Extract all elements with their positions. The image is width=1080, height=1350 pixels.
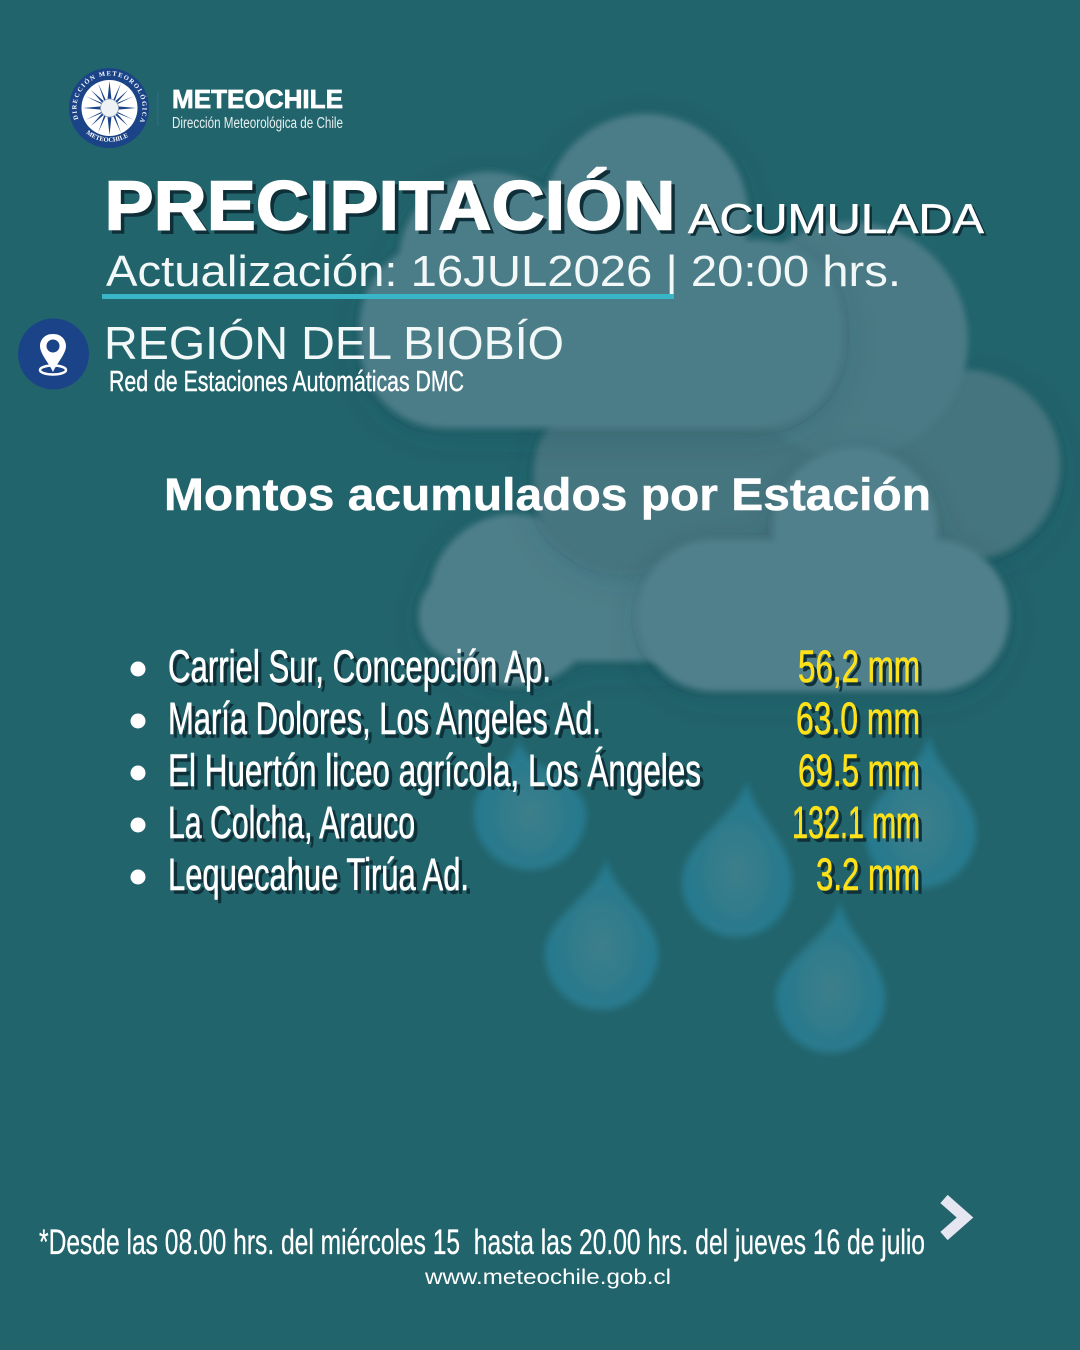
icon: rain drops xyxy=(474,733,976,1053)
station: Lequecahue: Lequecahue Tirúa Ad. xyxy=(168,849,469,900)
logo divider xyxy=(157,92,158,126)
station: María Dolores: María Dolores, Los Angeles Ad. xyxy=(172,696,604,748)
station list xyxy=(130,641,924,904)
station: María Dolores: María Dolores, Los Angeles Ad. xyxy=(168,693,601,744)
subtitle: acumulada: ACUMULADA xyxy=(690,198,986,244)
icon: compass star xyxy=(83,81,136,135)
logo ring text xyxy=(76,75,142,121)
arrow: next xyxy=(944,1199,965,1236)
station: Lequecahue xyxy=(130,849,924,904)
accent underline xyxy=(102,294,674,299)
icon: back cloud xyxy=(534,370,1060,570)
station: La Colcha: La Colcha, Arauco xyxy=(168,797,415,848)
station: La Colcha: 132.1 mm xyxy=(796,800,924,852)
station: Carriel Sur xyxy=(130,641,924,696)
station: El Huertón: 69.5 mm xyxy=(802,748,924,800)
logo bottom text xyxy=(79,125,140,142)
logo: Dirección Meteorológica: METEOCHILE xyxy=(86,130,128,142)
station: La Colcha: 132.1 mm xyxy=(792,797,920,848)
station: Carriel Sur: 56,2 mm xyxy=(798,641,920,692)
station: Lequecahue: 3.2 mm xyxy=(820,852,924,904)
logo: Dirección Meteorológica xyxy=(69,68,149,148)
brand name: METEOCHILE xyxy=(172,84,343,114)
title: PRECIPITACIÓN xyxy=(104,166,676,244)
update time: Actualización: 16JUL2026 | 20:00 hrs. xyxy=(106,247,901,296)
title: PRECIPITACIÓN xyxy=(108,170,679,248)
station: Lequecahue: 3.2 mm xyxy=(816,849,920,900)
station: El Huertón: El Huertón liceo agrícola, Los Ángeles xyxy=(168,745,701,796)
background illustration: rain cloud xyxy=(360,114,1060,1053)
network label: Red de Estaciones Automáticas DMC xyxy=(109,366,464,398)
station: La Colcha: La Colcha, Arauco xyxy=(172,800,418,852)
subtitle: acumulada: ACUMULADA xyxy=(688,195,984,242)
station: La Colcha xyxy=(130,797,924,852)
station: Carriel Sur: Carriel Sur, Concepción Ap. xyxy=(168,641,551,692)
logo: Dirección Meteorológica: DIRECCIÓN METEOROLÓGICA xyxy=(72,71,147,122)
station: El Huertón: 69.5 mm xyxy=(798,745,920,796)
station: Carriel Sur: 56,2 mm xyxy=(802,644,924,696)
website: www.meteochile.gob.cl xyxy=(424,1266,671,1289)
station: María Dolores: 63.0 mm xyxy=(796,693,920,744)
region heading: REGIÓN DEL BIOBÍO xyxy=(104,317,564,369)
icon: top cloud xyxy=(360,114,842,428)
station: El Huertón: El Huertón liceo agrícola, Los Ángeles xyxy=(172,748,704,800)
station: María Dolores: 63.0 mm xyxy=(800,696,924,748)
station: Carriel Sur: Carriel Sur, Concepción Ap. xyxy=(172,644,554,696)
icon: front cloud left xyxy=(419,514,739,686)
brand subtitle: Dirección Meteorológica de Chile xyxy=(172,115,343,132)
station: Lequecahue: Lequecahue Tirúa Ad. xyxy=(172,852,472,904)
icon: front cloud right xyxy=(638,448,1009,691)
section heading: Montos acumulados por Estación xyxy=(164,469,931,520)
icon: location pin xyxy=(18,318,89,390)
icon: top cloud right bump xyxy=(732,222,968,458)
